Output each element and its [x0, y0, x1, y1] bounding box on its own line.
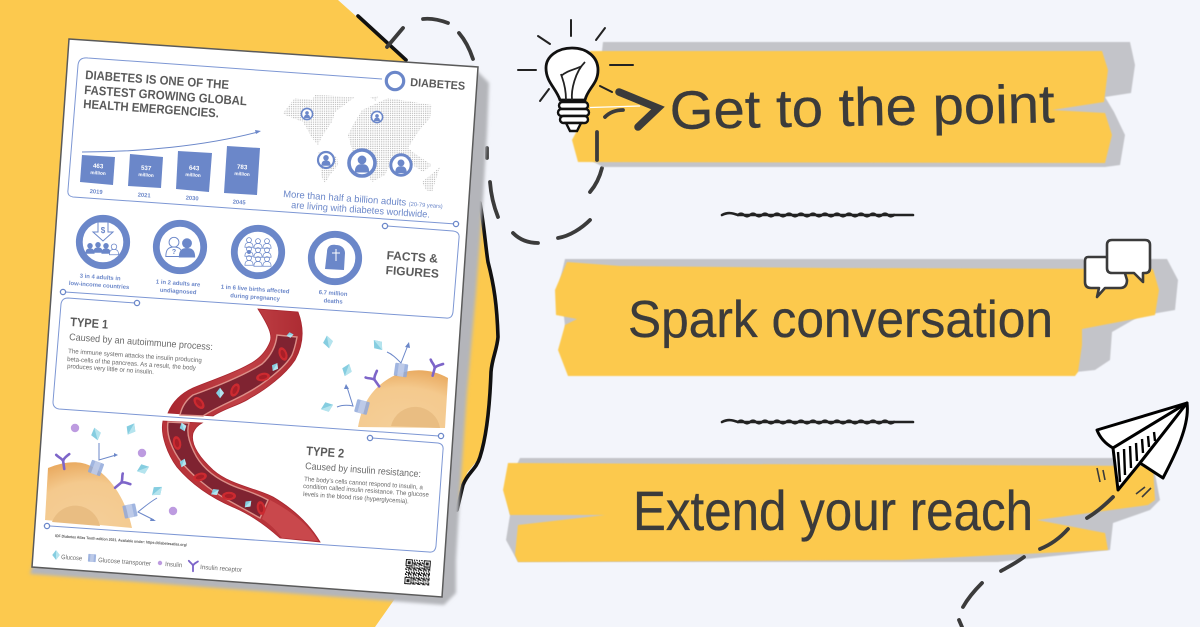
panel: type 1	[53, 298, 448, 439]
caption: income	[69, 274, 130, 291]
type 2 subheading: Caused by insulin resistance:	[305, 461, 421, 480]
icon: tombstone	[311, 234, 359, 282]
type 2 description: levels in the blood rise (hyperglycemia).	[303, 491, 409, 505]
beta cell upper	[319, 335, 448, 428]
bar chart: 643	[189, 165, 200, 172]
dashed flight path top	[387, 19, 602, 243]
heading text: Extend your reach	[633, 479, 1033, 542]
type 2 description: condition called insulin resistance. The glucose	[303, 483, 429, 499]
heading: HEALTH EMERGENCIES.	[83, 97, 219, 120]
QR code	[404, 559, 431, 586]
icon: paper plane	[1097, 403, 1187, 497]
caption: income: low-income countries	[69, 281, 130, 291]
banner: get to the point	[572, 42, 1135, 167]
bar chart: million	[90, 170, 106, 177]
legend: Glucose	[61, 554, 83, 562]
bar chart: 2021	[137, 193, 151, 199]
arrow: pointing to text	[597, 92, 658, 160]
icon: live births	[234, 228, 282, 276]
map caption: More than half a billion adults (20-79 years)	[283, 189, 443, 211]
bar chart: 2030	[185, 196, 199, 202]
divider	[722, 213, 913, 216]
type 1 description: The immune system attacks the insulin producing	[68, 348, 202, 364]
heading: facts and figures	[385, 248, 439, 281]
icon: undiagnosed: ?	[172, 249, 176, 256]
dashed flight path bottom	[959, 497, 1113, 627]
caption: live births: during pregnancy	[230, 293, 281, 303]
heading: FASTEST GROWING GLOBAL	[84, 83, 248, 108]
type 1 description	[67, 348, 202, 376]
type 1 subheading: Caused by an autoimmune process:	[69, 332, 213, 353]
map caption: are living with diabetes worldwide.	[291, 200, 430, 221]
caption: undiagnosed: undiagnosed	[160, 288, 197, 296]
banner: extend your reach	[503, 458, 1160, 562]
legend: Glucose transporter	[98, 557, 152, 568]
beta cell lower	[45, 421, 177, 528]
banner: spark conversation	[555, 259, 1178, 376]
bar chart: 2045	[232, 200, 246, 206]
logo: diabetes ring: DIABETES	[410, 77, 466, 93]
legend: Insulin	[165, 561, 183, 569]
caption: undiagnosed	[156, 279, 201, 296]
legend	[52, 550, 243, 574]
caption: deaths: 6.7 million	[318, 290, 348, 298]
bar chart	[80, 130, 261, 206]
icon: undiagnosed	[156, 223, 204, 271]
bar chart: 537	[141, 165, 152, 172]
divider	[722, 420, 913, 423]
world map	[283, 95, 440, 192]
blood vessel lower	[162, 421, 320, 542]
source note: IDF Diabetes Atlas Tenth edition 2021. Available under: https://diabetesatlas.org/	[55, 533, 188, 547]
heading: type 1: TYPE 1	[70, 315, 109, 332]
panel: type 2	[44, 421, 443, 552]
map caption	[283, 189, 443, 221]
yellow blob	[0, 0, 498, 627]
infographic sheet	[32, 39, 478, 597]
type 2 description: The body's cells cannot respond to insulin, a	[304, 476, 423, 491]
caption: live births: 1 in 6 live births affected	[221, 285, 290, 295]
type 1 description: beta-cells of the pancreas. As a result, the body	[67, 356, 197, 372]
caption: undiagnosed: 1 in 2 adults are	[156, 279, 201, 289]
bar chart: 783	[237, 164, 248, 171]
panel: growth and map	[68, 58, 466, 227]
icon: light bulb	[518, 20, 633, 131]
blood vessel upper	[168, 309, 302, 416]
type 1 description: produces very little or no insulin.	[67, 363, 154, 376]
heading: facts and figures: FACTS &	[386, 248, 439, 266]
icon: speech bubbles	[1085, 240, 1150, 297]
icon: income: $	[101, 226, 106, 235]
logo: diabetes ring	[386, 72, 466, 93]
caption: deaths: deaths	[323, 298, 343, 306]
heading: facts and figures: FIGURES	[385, 263, 439, 281]
heading	[83, 68, 248, 120]
panel: facts and figures	[60, 218, 459, 318]
bar chart: 463	[93, 163, 104, 170]
icon: income	[79, 218, 127, 266]
heading: type 2: TYPE 2	[306, 444, 345, 461]
caption: income: 3 in 4 adults in	[79, 274, 121, 282]
type 2 description	[303, 476, 429, 505]
bar chart: million	[234, 171, 250, 178]
heading text: Spark conversation	[628, 291, 1053, 349]
bar chart: million	[138, 172, 154, 179]
sheet shadow	[30, 66, 489, 605]
heading text: Get to the point	[669, 74, 1055, 141]
bar chart: million	[185, 172, 201, 179]
caption: live births	[221, 285, 290, 303]
caption: deaths	[318, 290, 348, 306]
heading: DIABETES IS ONE OF THE	[85, 68, 229, 92]
legend: Insulin receptor	[200, 564, 243, 574]
blob black outline	[358, 16, 498, 510]
map person markers	[301, 108, 411, 176]
bar chart: 2019	[89, 189, 103, 196]
